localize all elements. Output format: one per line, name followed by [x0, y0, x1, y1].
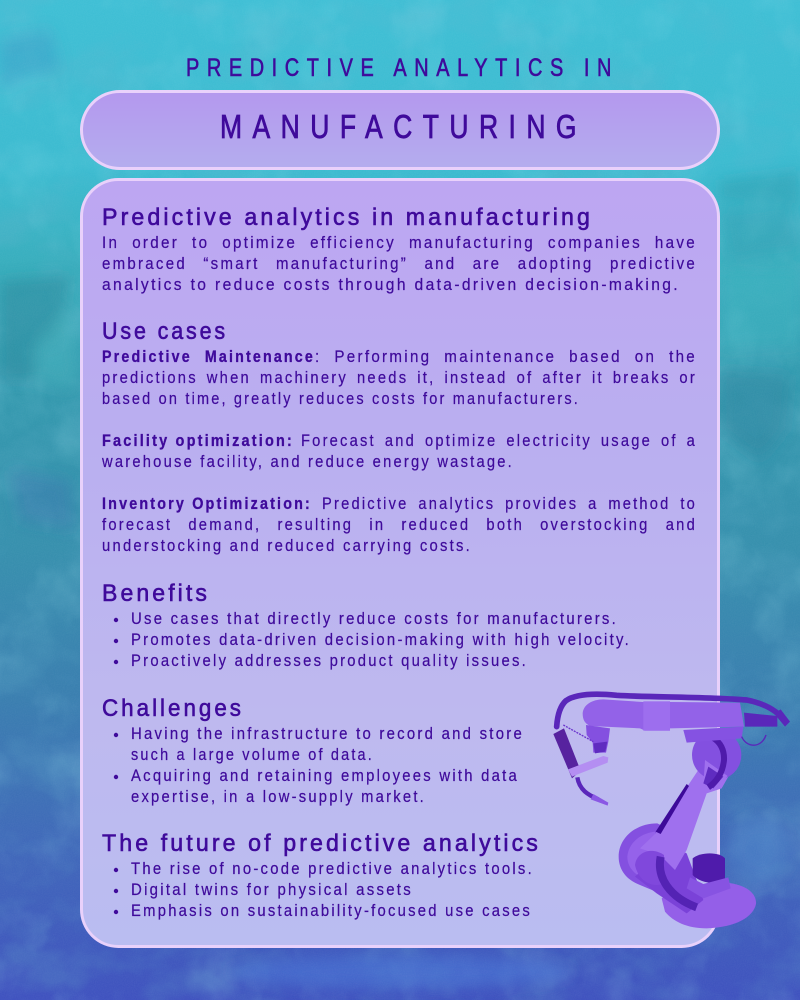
lower arm joint — [635, 851, 664, 885]
title line: PREDICTIVE ANALYTICS IN — [186, 54, 619, 82]
section: benefits: Benefits — [102, 580, 210, 607]
torch tip — [591, 794, 608, 806]
wire — [563, 725, 593, 742]
section: challenges: such a large volume of data. — [131, 746, 374, 764]
base platform — [662, 883, 756, 928]
section: use cases: Predictive Maintenance — [102, 348, 315, 366]
section: intro: Predictive analytics in manufacturing — [102, 204, 593, 231]
icon: robot arm — [553, 694, 790, 928]
section: challenges: Having the infrastructure to record and store — [131, 725, 524, 743]
section: intro — [102, 204, 697, 294]
section: challenges: Challenges — [102, 695, 244, 722]
section: intro: In order to optimize efficiency manufacturing companies have — [102, 234, 697, 252]
torch neck — [577, 777, 598, 799]
section: use cases: : Performing maintenance based on the — [315, 348, 697, 366]
dark cable at base — [660, 857, 697, 907]
section: use cases: Forecast and optimize electricity usage of a — [301, 432, 697, 450]
section: use cases: based on time, greatly reduces costs for manufacturers. — [102, 390, 580, 408]
wrist tip — [593, 742, 607, 753]
base flange — [619, 823, 683, 893]
section: use cases: warehouse facility, and reduce energy wastage. — [101, 453, 514, 471]
torch body — [553, 728, 581, 778]
section: benefits: Promotes data-driven decision-making with high velocity. — [131, 631, 631, 649]
hose end — [774, 709, 790, 727]
arm top opening — [703, 760, 728, 789]
rear bracket — [683, 727, 743, 743]
arm pocket — [703, 767, 723, 788]
section: benefits — [102, 580, 631, 670]
section: challenges: Acquiring and retaining employees with data — [131, 767, 519, 785]
section: challenges — [102, 695, 524, 806]
torch clamp — [568, 756, 608, 777]
section: use cases: Use cases — [102, 318, 228, 345]
main hose — [557, 694, 785, 727]
section: use cases: Predictive analytics provides a method to — [322, 495, 697, 513]
section: use cases: predictions when machinery needs it, instead of after it breaks or — [102, 369, 697, 387]
section: use cases: Facility optimization: — [102, 432, 294, 450]
rear motor — [744, 713, 777, 727]
section: future: The rise of no-code predictive analytics tools. — [131, 860, 534, 878]
section: future: Digital twins for physical assets — [131, 881, 413, 899]
title pill — [82, 92, 718, 168]
lower arm — [640, 760, 728, 870]
title: manufacturing: MANUFACTURING — [220, 108, 587, 145]
upper arm — [583, 699, 744, 731]
section: benefits: Proactively addresses product quality issues. — [131, 652, 528, 670]
section: future — [102, 830, 541, 920]
section: use cases: forecast demand, resulting in reduced both overstocking and — [102, 516, 697, 534]
dark slit — [656, 784, 689, 834]
elbow cable — [687, 735, 724, 787]
section: use cases: Inventory Optimization: — [102, 495, 312, 513]
section: future: The future of predictive analytics — [102, 830, 541, 857]
small cable loop — [742, 735, 766, 745]
base motor — [693, 853, 725, 883]
section: benefits: Use cases that directly reduce costs for manufacturers. — [131, 610, 618, 628]
section: use cases — [101, 318, 697, 555]
section: intro: analytics to reduce costs through data-driven decision-making. — [102, 276, 680, 294]
section: intro: embraced “smart manufacturing” and are adopting predictive — [102, 255, 697, 273]
main panel — [82, 180, 718, 946]
base body — [635, 847, 703, 913]
flange inner — [627, 832, 657, 877]
section: challenges: expertise, in a low-supply market. — [131, 788, 426, 806]
base collar — [687, 877, 731, 898]
section: use cases: understocking and reduced carrying costs. — [102, 537, 472, 555]
wrist block — [586, 725, 610, 753]
section: future: Emphasis on sustainability-focused use cases — [131, 902, 532, 920]
forearm sleeve — [643, 701, 670, 731]
elbow disc — [692, 730, 741, 780]
